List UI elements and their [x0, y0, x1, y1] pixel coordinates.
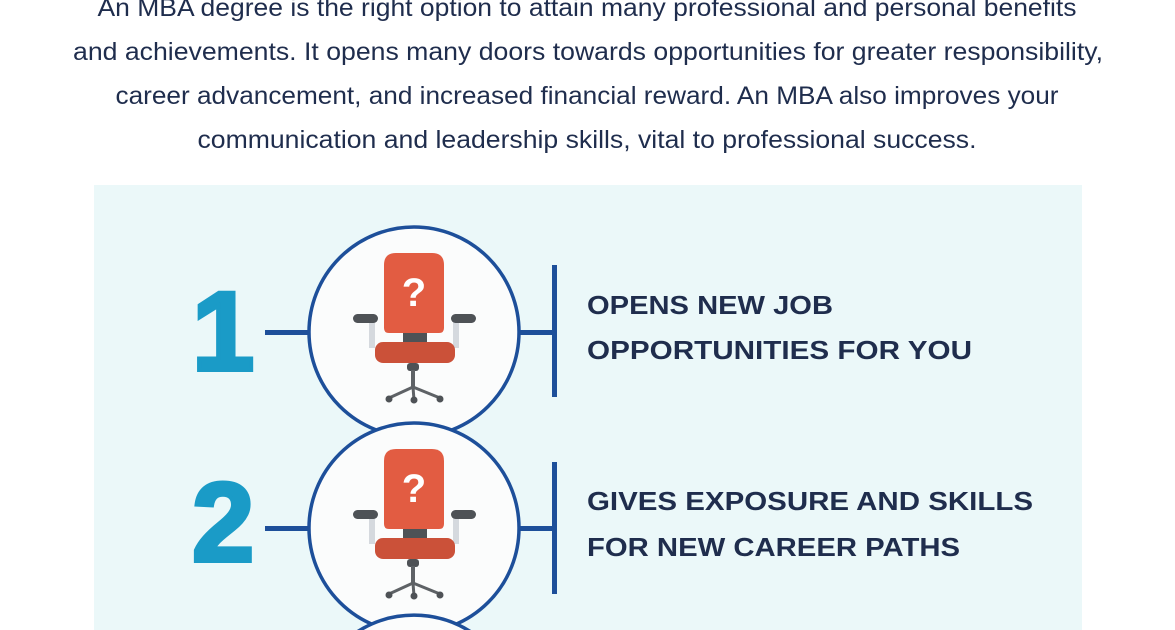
- icon: chair circle 2: [309, 423, 519, 630]
- intro text block: career advancement, and increased financial reward. An MBA also improves your: [116, 82, 1058, 110]
- heading 1: [587, 290, 972, 365]
- panel: benefits list: [94, 185, 1082, 630]
- heading 2: [587, 486, 1033, 562]
- intro text block: communication and leadership skills, vital to professional success.: [198, 126, 976, 154]
- number 1: 1: [192, 269, 254, 394]
- icon: chair circle 1: [309, 227, 519, 437]
- heading 1: OPPORTUNITIES FOR YOU: [587, 335, 972, 365]
- intro text block: and achievements. It opens many doors towards opportunities for greater responsibility,: [73, 38, 1103, 66]
- heading 2: GIVES EXPOSURE AND SKILLS: [587, 486, 1033, 516]
- circle 3 (partial): [357, 615, 471, 630]
- item 2: [192, 423, 1033, 630]
- heading 1: OPENS NEW JOB: [587, 290, 833, 320]
- intro text block: [73, 0, 1103, 154]
- item 1: [192, 227, 972, 437]
- heading 2: FOR NEW CAREER PATHS: [587, 532, 960, 562]
- number 2: 2: [192, 460, 254, 585]
